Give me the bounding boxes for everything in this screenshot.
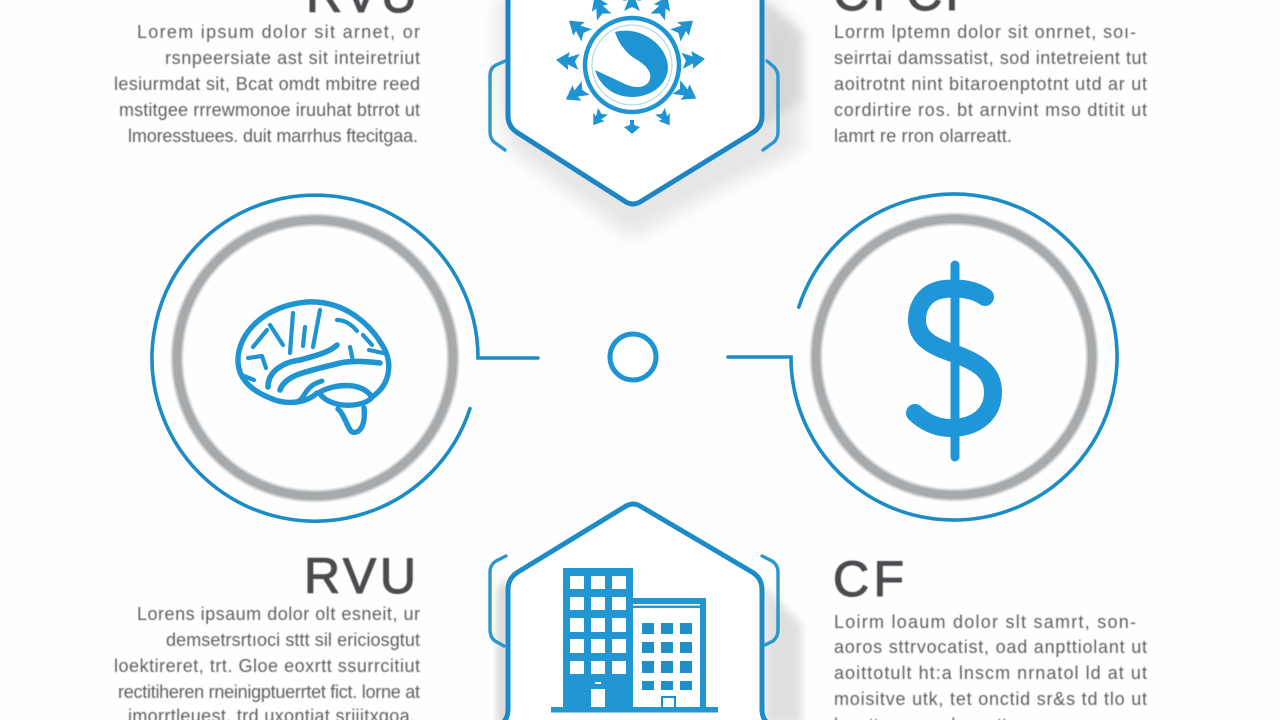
panel: center dot <box>610 334 656 380</box>
text block: RVU top body: mstitgee rrrewmonoe iruuhat btrrot ut <box>119 100 420 120</box>
left bracket <box>490 556 506 646</box>
text block: CF top body: aoitrotnt nint bitaroenptotnt utd ar ut <box>834 74 1147 94</box>
icon: buildings <box>551 568 718 712</box>
hexagon body <box>508 0 762 204</box>
hexagon body <box>502 504 768 720</box>
hexagon shadow <box>498 0 802 238</box>
panel: right dollar circle <box>728 194 1117 520</box>
outer arc and connector <box>152 195 538 521</box>
gray ring <box>816 219 1092 495</box>
icon: brain <box>238 302 389 432</box>
text block: CF top body: seirrtai damssatist, sod intetreient tut <box>834 48 1147 68</box>
heading: CF bottom: CF <box>833 551 904 607</box>
text block: RVU bottom body: loektireret, trt. Gloe eoxrtt ssurrcitiut <box>114 656 420 676</box>
text block: CF bottom body: aoros sttrvocatist, oad anpttiolant ut <box>834 637 1147 657</box>
text block: RVU top body: lmoresstuees. duit marrhus ftecitgaa. <box>128 126 418 146</box>
hexagon shadow <box>497 575 802 720</box>
text block: CF top body: Lorrm lptemn dolor sit onrnet, soı- <box>834 22 1136 42</box>
text block: RVU top body <box>114 22 420 146</box>
panel: RVU bottom text <box>114 548 420 720</box>
panel: CF bottom text <box>833 551 1147 720</box>
ground line <box>551 707 718 712</box>
panel: bottom hexagon <box>490 504 802 720</box>
right bracket <box>762 556 778 645</box>
text block: CF top body: lamrt re rron olarreatt. <box>834 126 1012 146</box>
icon: ring with crescent and arrows <box>555 0 706 134</box>
icon: dollar sign <box>915 265 993 457</box>
outer arc and connector <box>728 194 1117 520</box>
panel: CF top text <box>833 0 1147 146</box>
short building <box>633 598 706 708</box>
left bracket <box>490 61 505 150</box>
heading: RVU bottom: RVU <box>304 548 416 604</box>
text block: RVU top body: rsnpeersiate ast sit inteiretriut <box>165 48 420 68</box>
text block: RVU top body: lesiurmdat sit, Bcat omdt mbitre reed <box>114 74 420 94</box>
text block: CF bottom body: aoittotult ht:a lnscm nrnatol ld at ut <box>834 663 1147 683</box>
text block: RVU bottom body: rectitiheren rneinigptuerrtet fict. lorne at <box>118 682 420 702</box>
text block: CF top body: cordirtire ros. bt arnvint mso dtitit ut <box>834 100 1147 120</box>
text block: CF bottom body <box>834 612 1147 720</box>
text block: RVU bottom body: Lorens ipsaum dolor olt esneit, ur <box>137 604 420 624</box>
gray ring <box>177 220 453 496</box>
panel: top hexagon <box>490 0 802 238</box>
text block: CF top body <box>834 22 1147 146</box>
panel: left brain circle <box>152 195 538 521</box>
tall building <box>563 568 633 708</box>
panel: RVU top text <box>114 0 420 146</box>
right bracket <box>763 61 778 150</box>
text block: CF bottom body: moisitve utk, tet onctid sr&s td tlo ut <box>834 689 1147 709</box>
text block: RVU top body: Lorem ipsum dolor sit arnet, or <box>137 22 420 42</box>
text block: RVU bottom body: demsetrsrtıoci sttt sil ericiosgtut <box>166 630 420 650</box>
text block: CF bottom body: Loirm loaum dolor slt samrt, son- <box>834 612 1136 632</box>
text block: RVU bottom body <box>114 604 420 720</box>
